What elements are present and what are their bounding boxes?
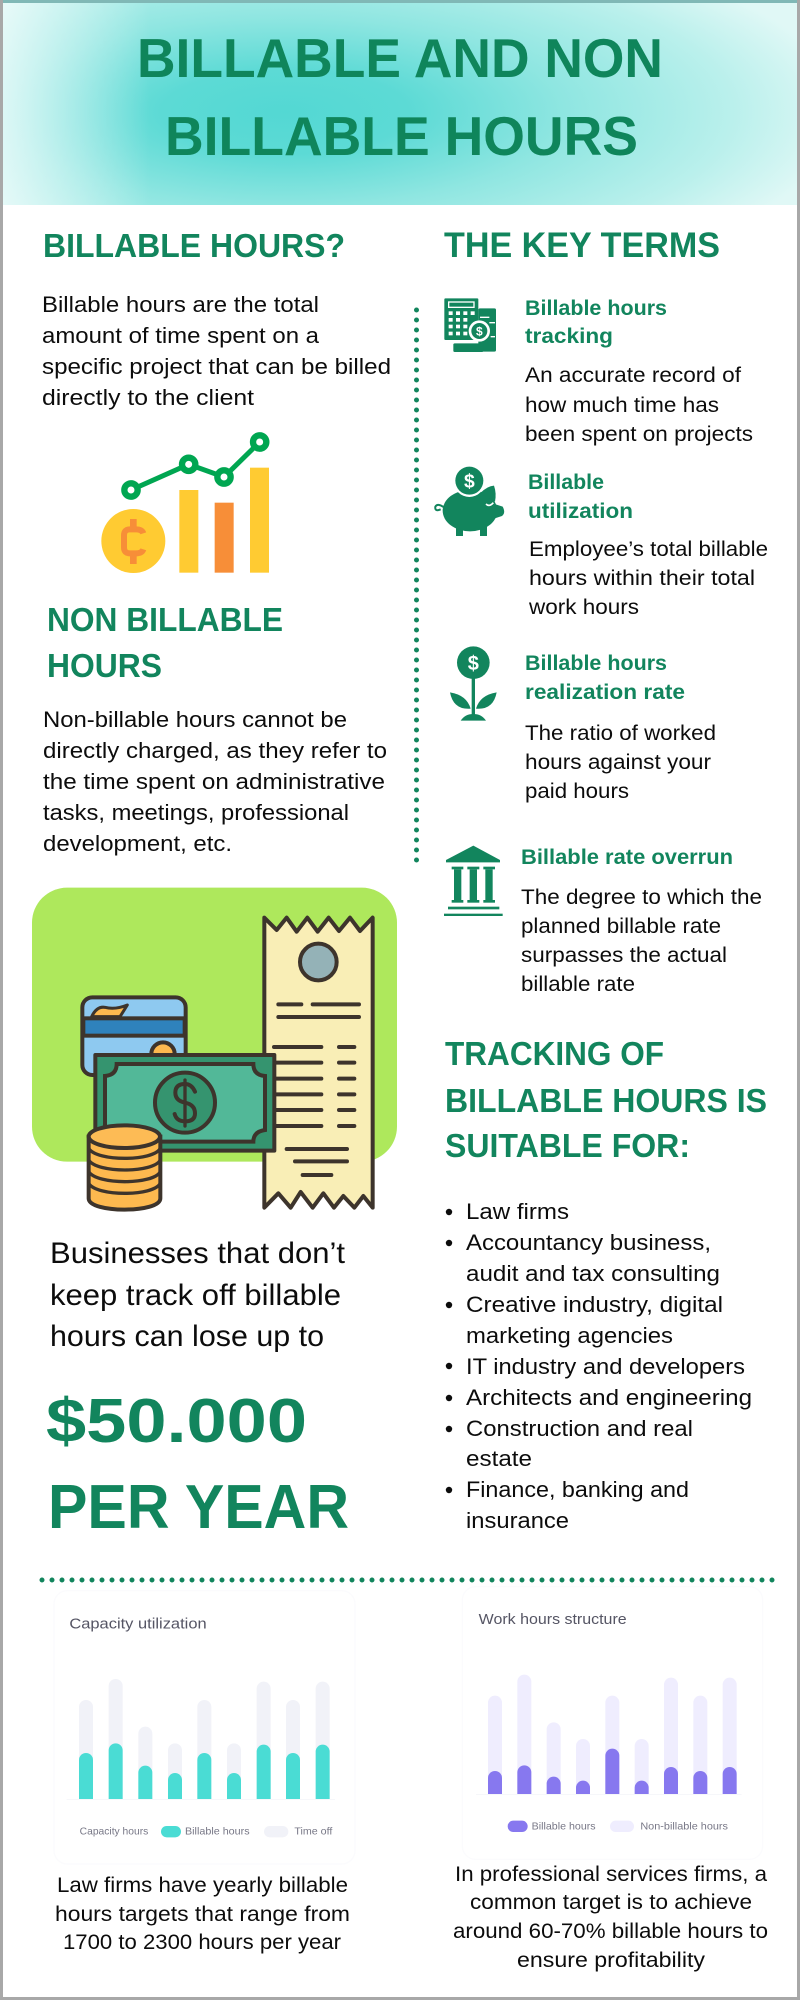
text: non billable definition: Non-billable hours cannot be <box>43 707 347 732</box>
text: billable hours definition: Billable hours are the total <box>42 292 319 317</box>
bullet list: industries: insurance <box>466 1508 569 1533</box>
bullet list: industries: Finance, banking and <box>466 1477 689 1502</box>
bar chart: capacity utilization: Capacity hours <box>80 1827 148 1838</box>
bullet list: industries: Architects and engineering <box>466 1385 752 1410</box>
term: realization rate: paid hours <box>525 779 629 803</box>
heading: non billable hours: HOURS <box>47 648 162 685</box>
header banner <box>0 0 800 205</box>
caption: professional services: ensure profitability <box>517 1948 705 1972</box>
text: non billable definition: tasks, meetings, professional <box>43 800 349 825</box>
bar chart: capacity utilization: Time off <box>294 1827 333 1838</box>
caption: law firms <box>55 1873 350 1954</box>
bar chart: capacity utilization: Capacity utilization <box>69 1616 207 1632</box>
bar chart: capacity utilization <box>66 1618 335 1838</box>
caption: professional services <box>453 1862 768 1972</box>
term: billable rate overrun <box>521 846 762 996</box>
heading: tracking suitable for: BILLABLE HOURS IS <box>445 1083 767 1120</box>
key figure: $50.000 per year: PER YEAR <box>48 1472 349 1542</box>
heading: tracking suitable for <box>445 1036 767 1165</box>
bullet list: industries: Creative industry, digital <box>466 1292 723 1317</box>
heading: tracking suitable for: TRACKING OF <box>445 1036 664 1073</box>
term: billable hours tracking: tracking <box>525 325 613 348</box>
title: BILLABLE HOURS <box>165 106 638 167</box>
term: realization rate <box>525 652 716 803</box>
bar chart: work hours structure: Non-billable hours <box>640 1821 728 1832</box>
term: billable hours tracking: Billable hours <box>525 297 667 320</box>
term: billable rate overrun: billable rate <box>521 972 635 996</box>
key figure: $50.000 per year: $50.000 <box>46 1386 307 1456</box>
text: non billable definition: development, etc. <box>43 831 232 856</box>
icon: calculator <box>444 298 496 352</box>
bullet list: industries: audit and tax consulting <box>466 1261 720 1286</box>
icon: piggy bank <box>435 466 504 536</box>
bullet list: industries: IT industry and developers <box>466 1354 745 1379</box>
term: billable utilization: Billable <box>528 471 604 494</box>
text: businesses lose <box>50 1237 346 1353</box>
icon: bank building <box>444 846 503 916</box>
heading: non billable hours <box>47 602 283 685</box>
bullet list: industries <box>446 1199 752 1533</box>
text: businesses lose: Businesses that don’t <box>50 1237 346 1270</box>
illustration: card, banknote, coins, receipt <box>32 888 397 1210</box>
icon: piggy bank: $ <box>464 472 475 493</box>
heading: the key terms: THE KEY TERMS <box>444 226 720 265</box>
term: realization rate: The ratio of worked <box>525 721 716 745</box>
term: billable rate overrun: surpasses the actual <box>521 943 727 967</box>
caption: professional services: In professional services firms, a <box>455 1862 767 1886</box>
term: billable hours tracking: been spent on projects <box>525 422 753 446</box>
title: BILLABLE AND NON <box>137 28 663 89</box>
term: billable utilization: Employee’s total billable <box>529 537 768 561</box>
term: billable utilization: utilization <box>528 500 633 523</box>
caption: professional services: common target is to achieve <box>470 1890 752 1914</box>
text: billable hours definition: directly to the client <box>42 385 255 410</box>
term: billable rate overrun: The degree to which the <box>521 885 762 909</box>
bullet list: industries: Construction and real <box>466 1416 693 1441</box>
bar chart: capacity utilization: Billable hours <box>185 1827 250 1838</box>
term: realization rate: hours against your <box>525 750 711 774</box>
caption: law firms: 1700 to 2300 hours per year <box>63 1930 341 1954</box>
term: billable hours tracking <box>525 297 753 446</box>
bullet list: industries: marketing agencies <box>466 1323 673 1348</box>
icon: money flower: $ <box>468 653 479 675</box>
caption: law firms: Law firms have yearly billable <box>57 1873 348 1897</box>
title <box>137 28 663 167</box>
term: billable hours tracking: An accurate record of <box>525 363 741 387</box>
bar chart: work hours structure: Work hours structure <box>479 1612 627 1628</box>
bullet list: industries: Law firms <box>466 1199 569 1224</box>
icon: calculator: $ <box>476 324 483 338</box>
dotted horizontal divider <box>42 1578 773 1582</box>
term: realization rate: Billable hours <box>525 652 667 675</box>
icon: rising chart with coin <box>101 435 269 573</box>
bar chart: work hours structure: Billable hours <box>532 1821 596 1832</box>
term: billable utilization <box>528 471 768 619</box>
text: non billable definition: the time spent on administrative <box>43 769 385 794</box>
term: billable utilization: work hours <box>528 595 639 619</box>
text: businesses lose: keep track off billable <box>50 1279 341 1312</box>
text: billable hours definition: amount of time spent on a <box>42 323 320 348</box>
term: billable rate overrun: planned billable rate <box>521 914 721 938</box>
dotted vertical divider <box>414 310 419 862</box>
heading: tracking suitable for: SUITABLE FOR: <box>445 1128 690 1165</box>
text: businesses lose: hours can lose up to <box>50 1320 324 1353</box>
term: billable utilization: hours within their total <box>529 566 755 590</box>
text: billable hours definition: specific project that can be billed <box>42 354 391 379</box>
term: realization rate: realization rate <box>525 681 685 704</box>
caption: law firms: hours targets that range from <box>55 1902 350 1926</box>
term: billable hours tracking: how much time has <box>525 393 719 417</box>
text: non billable definition: directly charged, as they refer to <box>43 738 387 763</box>
text: billable hours definition <box>42 292 391 410</box>
heading: non billable hours: NON BILLABLE <box>47 602 283 639</box>
term: billable rate overrun: Billable rate overrun <box>521 846 733 869</box>
bar chart: work hours structure <box>476 1613 742 1832</box>
caption: professional services: around 60-70% billable hours to <box>453 1919 768 1943</box>
text: non billable definition <box>43 707 387 856</box>
bullet list: industries: Accountancy business, <box>466 1230 711 1255</box>
heading: billable hours: BILLABLE HOURS? <box>43 228 345 265</box>
key figure: $50.000 per year <box>46 1386 349 1542</box>
bullet list: industries: estate <box>466 1446 532 1471</box>
icon: money flower <box>450 646 497 721</box>
